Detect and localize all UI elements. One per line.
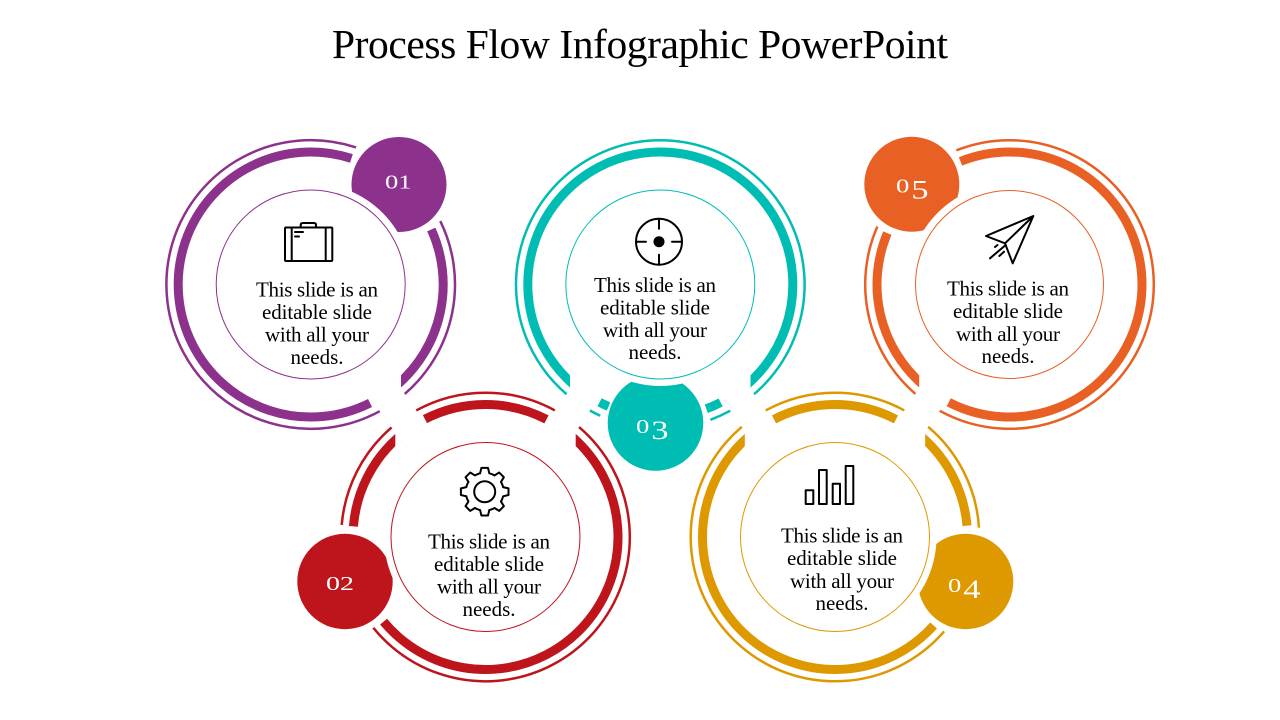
badge: 03 [608, 375, 703, 471]
text: step 04: This slide is an [781, 524, 904, 548]
icon: bar chart [806, 466, 853, 504]
text: step 02: needs. [462, 597, 516, 621]
badge number: 02: 0 [326, 573, 340, 595]
rings: step 03 [457, 81, 864, 488]
text: step 05: with all your [956, 322, 1060, 346]
rings: step 04 [631, 333, 1039, 720]
panel: step 05 [806, 81, 1213, 488]
icon: briefcase [285, 223, 332, 261]
text: step 01: with all your [265, 323, 369, 347]
badge number: 01: 1 [398, 172, 412, 194]
text: step 03 [594, 273, 716, 364]
badge number: 05: 0 [896, 175, 909, 197]
title: Process Flow Infographic PowerPoint [332, 21, 948, 67]
rings: step 02 [282, 334, 689, 720]
badge number: 04: 0 [948, 575, 961, 597]
badge number: 03: 0 [636, 416, 649, 438]
badge number: 01: 0 [385, 172, 398, 194]
text: step 02: with all your [437, 574, 541, 598]
text: step 03: needs. [628, 340, 682, 364]
text: step 02: This slide is an [428, 529, 550, 553]
inner circle: step 05 [908, 183, 1111, 386]
text: step 05: editable slide [953, 299, 1063, 323]
icon: paper plane [986, 216, 1033, 263]
text: step 02: editable slide [434, 552, 544, 576]
panel: step 03 [457, 81, 864, 488]
panel: step 04 [631, 333, 1039, 720]
text: step 03: editable slide [600, 296, 710, 320]
badge: 01 [352, 137, 446, 232]
text: step 03: with all your [603, 318, 707, 342]
text: step 01: This slide is an [256, 278, 378, 302]
rings: step 01 [115, 89, 506, 480]
panel: step 01 [115, 89, 506, 480]
icon: gear [461, 468, 508, 516]
text: step 04: with all your [790, 569, 894, 593]
text: step 01: editable slide [262, 300, 372, 324]
badge number: 04: 4 [963, 575, 981, 604]
inner circle: step 01 [209, 183, 412, 386]
panel: step 02 [282, 334, 689, 720]
badge: 02 [297, 534, 393, 629]
text: step 01 [256, 278, 378, 369]
text: step 05 [947, 277, 1070, 368]
badge number: 05: 5 [911, 175, 929, 204]
badge number: 03: 3 [651, 416, 669, 445]
badge number: 02: 2 [340, 573, 354, 595]
text: step 04: needs. [816, 591, 868, 615]
badge: 05 [864, 137, 959, 232]
badge: 04 [918, 534, 1013, 629]
inner circle: step 04 [734, 436, 936, 638]
inner circle: step 02 [384, 436, 587, 638]
inner circle: step 03 [559, 183, 762, 386]
text: step 02 [428, 529, 550, 621]
text: step 04 [781, 524, 904, 615]
text: step 05: This slide is an [947, 277, 1070, 301]
rings: step 05 [806, 81, 1213, 488]
text: step 03: This slide is an [594, 273, 716, 297]
text: step 01: needs. [290, 345, 344, 369]
icon: target [636, 219, 682, 265]
text: step 04: editable slide [787, 546, 897, 570]
text: step 05: needs. [982, 344, 1034, 368]
